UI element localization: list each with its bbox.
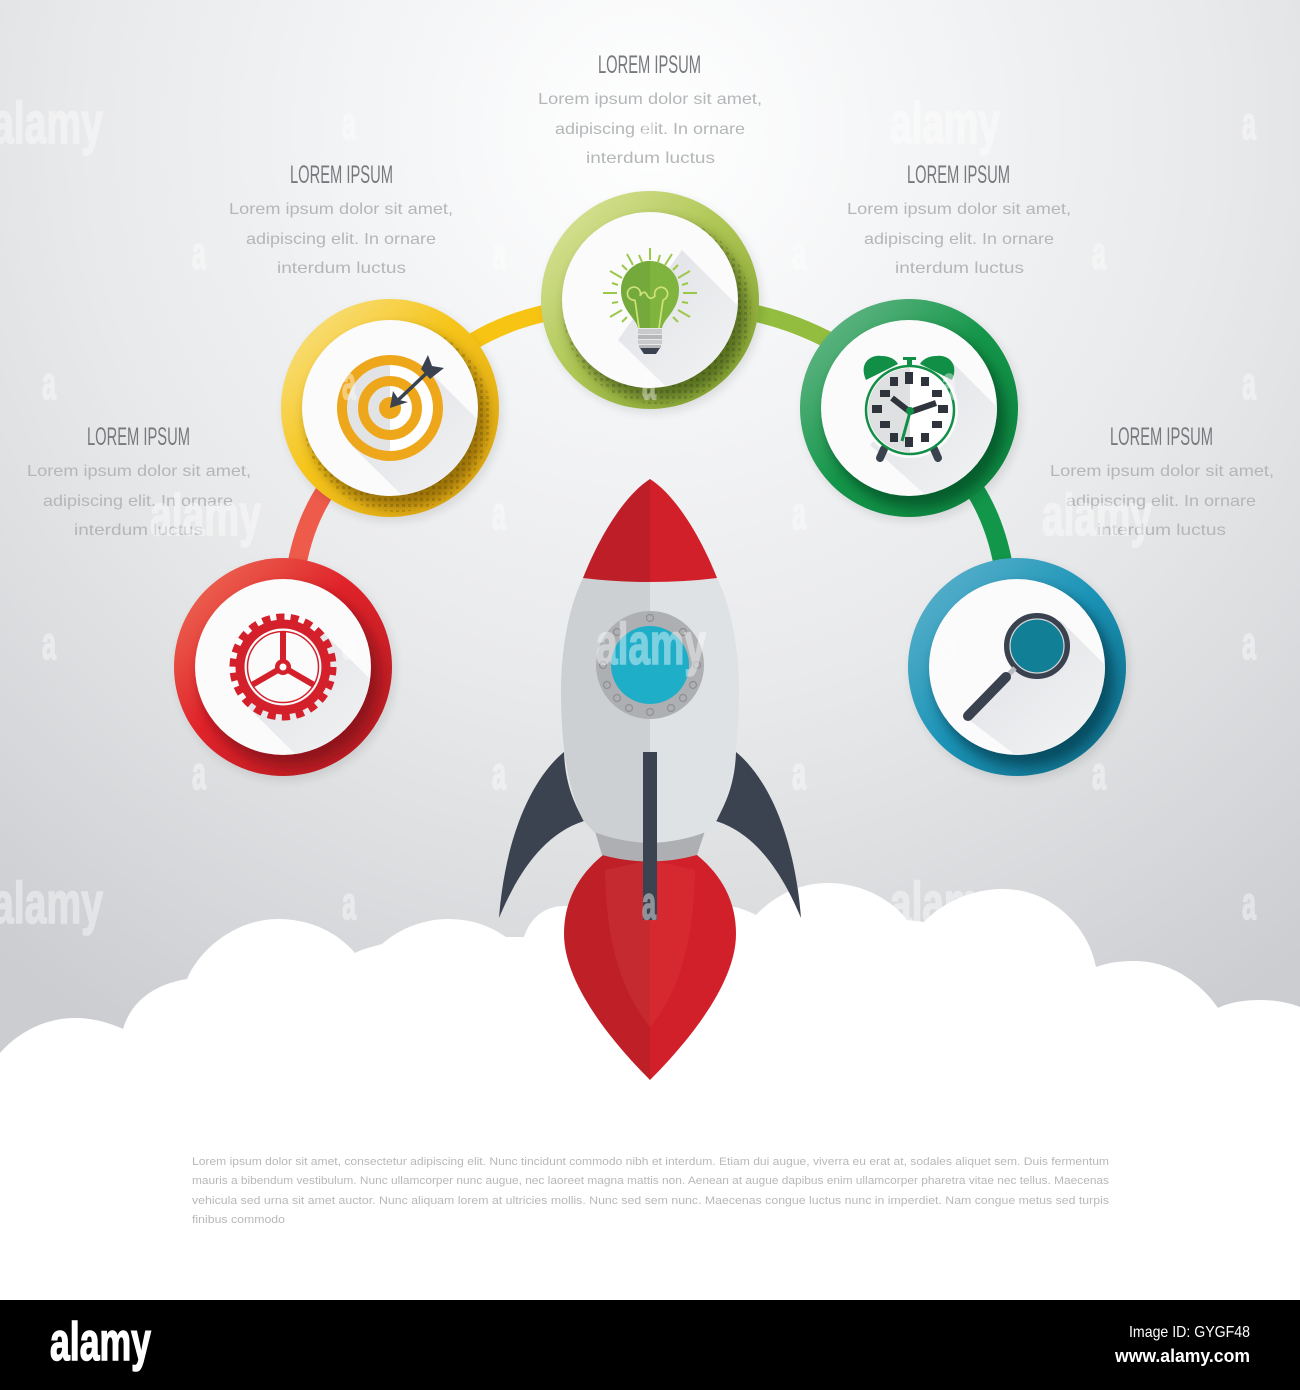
watermarks: a <box>792 747 806 799</box>
icon: gear <box>234 618 332 716</box>
step 4: green clock node <box>800 299 1023 523</box>
label: top centre: Lorem ipsum dolor sit amet, <box>538 91 762 108</box>
watermarks: a <box>192 227 206 279</box>
watermarks: a <box>792 487 806 539</box>
step 5: blue magnifier node <box>908 558 1131 782</box>
watermarks: a <box>192 747 206 799</box>
watermarks: a <box>642 877 656 929</box>
watermarks: alamy <box>890 91 1000 156</box>
watermarks: alamy <box>890 871 1000 936</box>
label: left: interdum luctus <box>74 522 203 539</box>
rocket flame <box>564 855 736 1080</box>
watermarks: a <box>1092 227 1106 279</box>
label: left <box>27 423 251 539</box>
watermarks: alamy <box>1042 483 1152 548</box>
watermarks: a <box>492 487 506 539</box>
watermarks: a <box>942 357 956 409</box>
watermarks: a <box>642 357 656 409</box>
bottom paragraph <box>192 1156 1110 1226</box>
step 2: yellow target node <box>281 299 504 523</box>
watermarks: a <box>1092 747 1106 799</box>
label: right <box>1050 423 1274 539</box>
rocket body <box>561 578 739 843</box>
watermarks: a <box>342 357 356 409</box>
watermarks: a <box>42 617 56 669</box>
watermarks: a <box>1242 877 1256 929</box>
label: left: Lorem ipsum dolor sit amet, <box>27 463 251 480</box>
watermarks: a <box>1242 357 1256 409</box>
rocket fin bar <box>643 752 657 920</box>
label: left: adipiscing elit. In ornare <box>43 493 233 510</box>
label: upper left: adipiscing elit. In ornare <box>246 231 436 248</box>
step 1: red gear node <box>174 558 397 782</box>
label: upper left <box>229 161 453 277</box>
bottom paragraph: vehicula sed urna sit amet auctor. Nunc aliquam lorem at ultricies mollis. Nunc sed sem nunc. Maecenas congue luctus nunc in imperdiet. Nam congue metus sed turpis <box>192 1195 1110 1207</box>
label: right: interdum luctus <box>1097 522 1226 539</box>
label: upper left: Lorem ipsum dolor sit amet, <box>229 201 453 218</box>
label: right: adipiscing elit. In ornare <box>1066 493 1256 510</box>
icon: alarm clock <box>862 356 958 458</box>
label: upper right: interdum luctus <box>895 260 1024 277</box>
watermarks: alamy <box>150 483 261 548</box>
icon: magnifying glass <box>968 616 1067 716</box>
watermarks: a <box>1242 617 1256 669</box>
label: left: LOREM IPSUM <box>87 423 190 451</box>
bottom paragraph: mauris a bibendum vestibulum. Nunc ullamcorper nunc augue, nec laoreet magna mattis non. Aenean at augue dapibus enim ullamcorper pharetra vitae nec tellus. Maecenas <box>192 1175 1110 1187</box>
watermarks: a <box>642 97 656 149</box>
watermarks: a <box>792 227 806 279</box>
watermarks: a <box>492 227 506 279</box>
clouds <box>0 883 1300 1300</box>
watermarks: a <box>342 97 356 149</box>
label: top centre: LOREM IPSUM <box>598 51 701 79</box>
label: upper right: Lorem ipsum dolor sit amet, <box>847 201 1071 218</box>
watermarks: a <box>342 877 356 929</box>
label: upper left: interdum luctus <box>277 260 406 277</box>
label: top centre <box>538 51 762 167</box>
label: right: LOREM IPSUM <box>1110 423 1213 451</box>
watermarks: a <box>942 617 956 669</box>
label: upper left: LOREM IPSUM <box>290 161 393 189</box>
connector arcs <box>297 313 1003 564</box>
watermarks: a <box>1242 97 1256 149</box>
icon: light bulb <box>603 248 697 354</box>
bottom paragraph: finibus commodo <box>192 1214 285 1226</box>
watermarks: a <box>492 747 506 799</box>
watermarks: a <box>342 617 356 669</box>
label: upper right <box>847 161 1071 277</box>
footer url: www.alamy.com <box>1114 1346 1250 1366</box>
rocket collar <box>594 828 706 862</box>
footer image id: Image ID: GYGF48 <box>1129 1324 1250 1341</box>
step 3: lime bulb node <box>541 191 764 415</box>
icon: target with arrow <box>337 355 444 461</box>
label: top centre: adipiscing elit. In ornare <box>555 121 745 138</box>
watermarks <box>0 91 1256 936</box>
watermarks: alamy <box>596 612 706 677</box>
label: upper right: adipiscing elit. In ornare <box>864 231 1054 248</box>
watermarks: a <box>42 357 56 409</box>
label: top centre: interdum luctus <box>586 150 715 167</box>
rocket <box>499 479 801 1080</box>
rocket porthole <box>596 611 704 719</box>
rocket fins <box>499 752 801 918</box>
bottom paragraph: Lorem ipsum dolor sit amet, consectetur adipiscing elit. Nunc tincidunt commodo nibh et interdum. Etiam dui augue, viverra eu erat at, sodales aliquet sem. Duis fermentum <box>192 1156 1109 1168</box>
footer bar <box>0 1300 1300 1390</box>
rocket nose <box>583 479 717 582</box>
footer logo: alamy <box>50 1312 151 1372</box>
label: upper right: LOREM IPSUM <box>907 161 1010 189</box>
label: right: Lorem ipsum dolor sit amet, <box>1050 463 1274 480</box>
